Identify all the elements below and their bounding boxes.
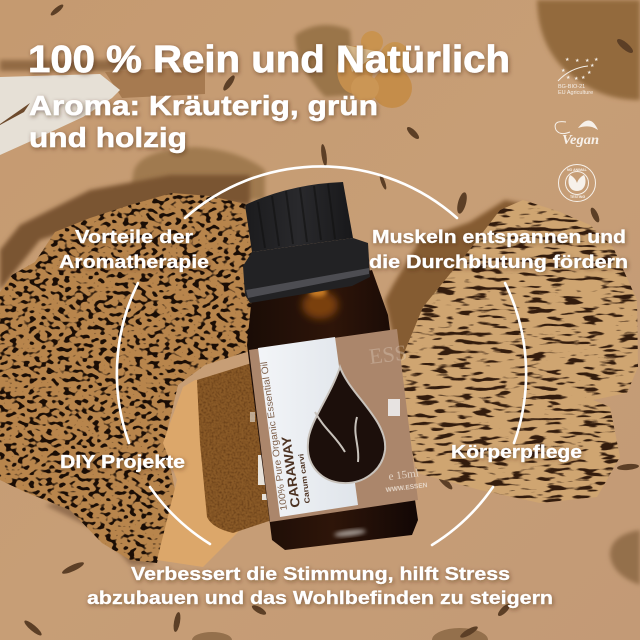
left mushroom stem	[157, 362, 272, 567]
cap ribs	[258, 184, 335, 248]
label product text: 100% Pure Organic Essential Oil	[259, 361, 290, 511]
bottom glass reflection	[334, 528, 366, 538]
subtitle	[29, 90, 378, 153]
decorative stick	[0, 60, 205, 155]
label product text: Carum carvi	[296, 453, 312, 504]
walnut	[295, 25, 412, 108]
left mushroom	[0, 193, 272, 567]
icon: EU organic leaf: ★	[587, 70, 592, 76]
label white panel	[258, 337, 358, 517]
collar	[243, 238, 370, 303]
title block	[28, 39, 510, 153]
label: aromatherapy	[59, 227, 209, 272]
icon: EU organic leaf: ★	[561, 68, 566, 74]
left mushroom cap	[0, 193, 255, 563]
icon: no animal testing: TESTING	[570, 195, 585, 199]
label brand text: e 15ml	[388, 467, 419, 483]
label: DIY: DIY Projekte	[60, 452, 185, 472]
label product text: CARAWAY	[278, 435, 303, 509]
icon: no animal testing: NO ANIMAL	[567, 168, 588, 172]
label product text	[259, 361, 312, 511]
main title: 100 % Rein und Natürlich	[28, 39, 510, 81]
icon: EU organic leaf: ★	[566, 75, 571, 81]
circular arcs	[117, 166, 526, 545]
label brand text	[368, 340, 428, 494]
icon: vegan	[555, 120, 599, 148]
label: body care: Körperpflege	[451, 442, 582, 462]
right mushroom	[397, 200, 638, 503]
cap	[245, 182, 353, 252]
icon: vegan: Vegan	[562, 133, 599, 148]
amber neck glow	[302, 287, 338, 319]
icon: EU organic leaf: BG-BIO-21	[558, 84, 585, 90]
label: muscles and circulation	[369, 227, 628, 272]
label: aromatherapy: Aromatherapie	[59, 252, 209, 272]
icon: EU organic leaf: ★	[590, 63, 595, 69]
icon: no animal testing	[558, 164, 596, 202]
icon: EU organic leaf: ★	[575, 58, 580, 64]
label brand text: WWW.ESSEN	[385, 482, 428, 494]
essential oil bottle	[243, 182, 428, 550]
label: mood and wellbeing: abzubauen und das Wohlbefinden zu steigern	[87, 588, 553, 608]
subtitle: Aroma: Kräuterig, grün	[29, 90, 378, 121]
label brown wrap	[249, 329, 418, 522]
label: mood and wellbeing	[87, 564, 553, 608]
benefit labels	[59, 227, 628, 608]
bottle glass	[247, 270, 418, 550]
label: aromatherapy: Vorteile der	[75, 227, 193, 247]
label: mood and wellbeing: Verbessert die Stimmung, hilft Stress	[131, 564, 510, 584]
icon: EU organic leaf	[558, 57, 599, 96]
icon: EU organic leaf: ★	[585, 58, 590, 64]
drop logo	[308, 367, 385, 483]
subtitle: und holzig	[29, 122, 187, 153]
icon: EU organic leaf: ★	[594, 57, 599, 63]
icon: EU organic leaf: ★	[565, 57, 570, 63]
label: muscles and circulation: die Durchblutung fördern	[369, 252, 628, 272]
label brand text: ESS	[368, 340, 408, 369]
drop logo flame	[315, 412, 358, 462]
icon: EU organic leaf: ★	[574, 76, 579, 82]
icon: EU organic leaf: ★	[581, 75, 586, 81]
stem label marks	[250, 412, 268, 500]
label: muscles and circulation: Muskeln entspannen und	[372, 227, 626, 247]
icon: EU organic leaf: EU Agriculture	[558, 90, 593, 96]
